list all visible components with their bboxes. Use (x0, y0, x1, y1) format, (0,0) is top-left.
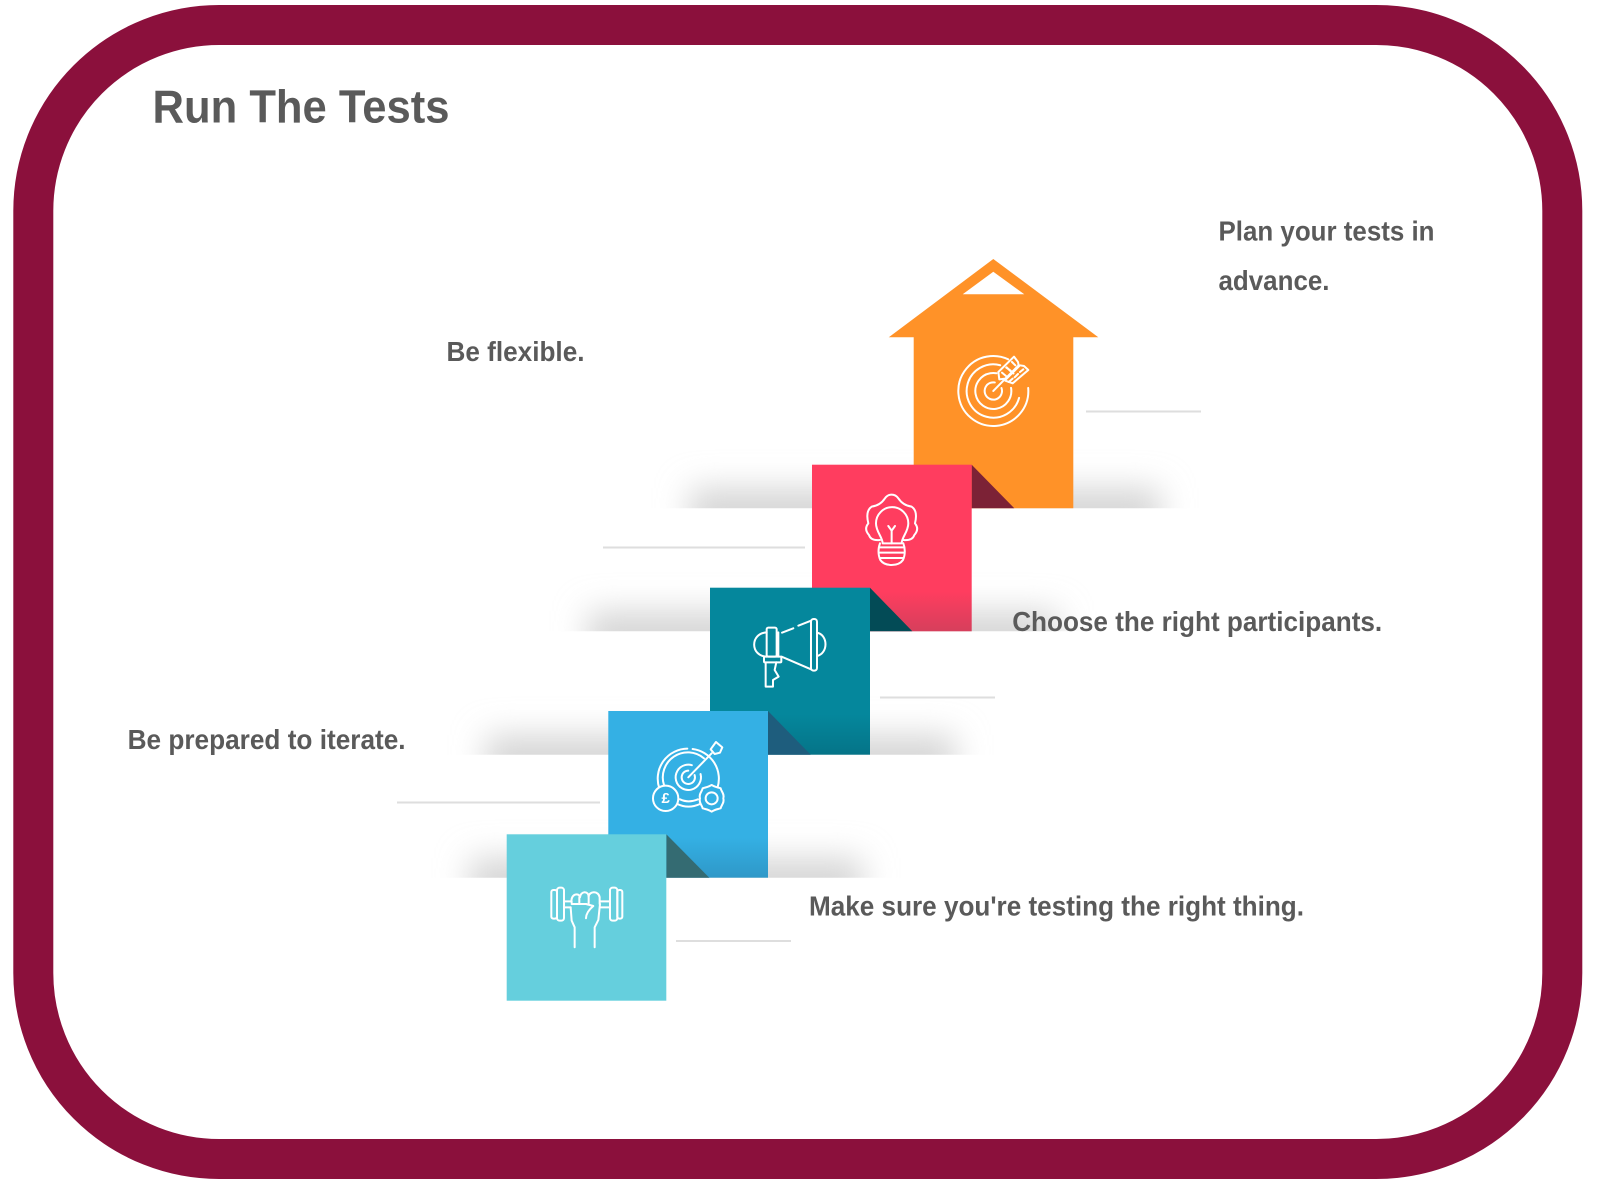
fold: teal (870, 588, 912, 631)
fold: red (972, 465, 1014, 508)
step 1: light blue square (507, 834, 709, 1001)
text: be flexible: Be flexible. (446, 336, 584, 367)
step 4: red square (812, 465, 1014, 631)
text: be prepared to iterate: Be prepared to iterate. (128, 724, 406, 755)
step 2: blue square: £ (662, 790, 671, 807)
fold: light blue (666, 834, 709, 878)
icon: target with pound coin and gear (653, 742, 724, 812)
icon: target with arrow (955, 353, 1031, 429)
icon: light bulb in gear (866, 495, 917, 565)
text: plan your tests: advance. (1218, 265, 1330, 296)
step 3: teal square (710, 588, 912, 755)
title: Run The Tests (152, 81, 450, 133)
step 5: orange house arrow (889, 259, 1098, 508)
leader line: step 2 (397, 802, 600, 804)
leader line: step 4 (603, 546, 805, 548)
text: make sure you're testing the right thing: Make sure you're testing the right thing. (809, 890, 1304, 922)
icon: fist with dumbbell (551, 888, 622, 947)
text: plan your tests (1218, 216, 1434, 296)
text: choose the right participants: Choose the right participants. (1012, 606, 1382, 637)
leader line: step 1 (676, 940, 791, 942)
icon: megaphone (754, 619, 825, 687)
step shadows (470, 488, 1160, 908)
fold: blue (768, 711, 811, 755)
leader line: step 3 (880, 696, 995, 698)
text: plan your tests: Plan your tests in (1218, 216, 1434, 247)
step 2: blue square (608, 711, 811, 878)
leader line: step 5 (1086, 410, 1201, 412)
